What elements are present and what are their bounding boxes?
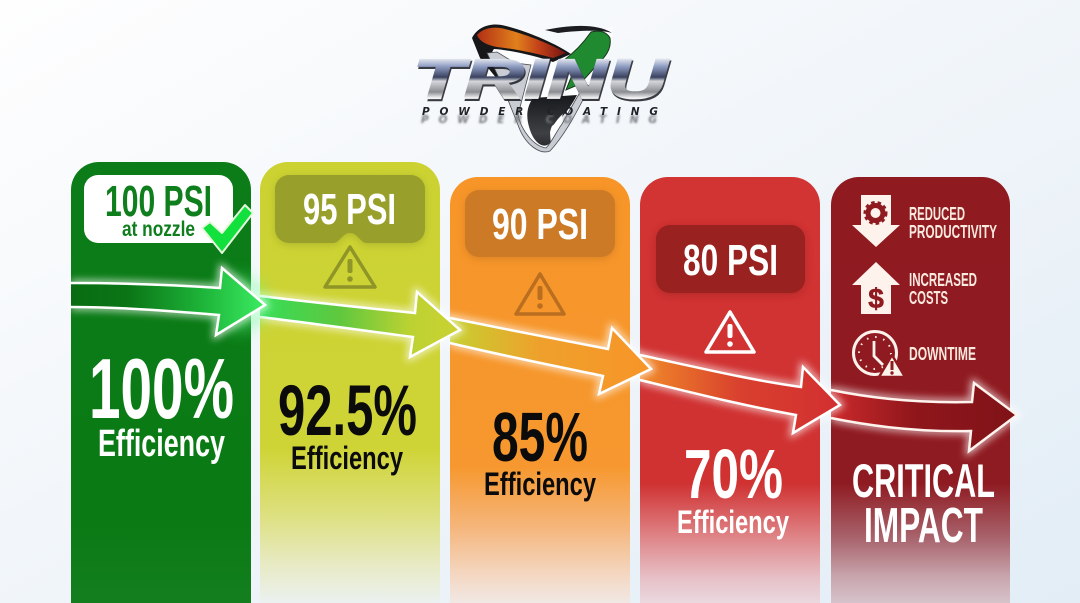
logo wordmark shadow: TRINU [414, 49, 670, 112]
arrow 3: 90 PSI to 80 PSI [450, 318, 651, 394]
icon: increased costs arrow with dollar: $ [868, 283, 884, 314]
logo: TriNu Powder Coating [413, 24, 670, 152]
pressure badge [656, 225, 805, 295]
pressure badge: 90 PSI [492, 200, 588, 249]
arrow 1: 100 PSI to 95 PSI [71, 268, 266, 335]
icon: reduced productivity arrow with gear [852, 195, 900, 247]
pressure badge: 95 PSI [303, 185, 396, 234]
column 2: 95 PSI [260, 162, 440, 603]
impact heading: IMPACT [864, 499, 983, 553]
white pressure badge: at nozzle [122, 218, 195, 241]
percent: 100% [89, 342, 234, 437]
icon: clock with warning [854, 332, 905, 377]
text: reduced productivity [909, 204, 997, 242]
pressure badge [465, 190, 615, 259]
icon: increased costs arrow with dollar [852, 262, 900, 314]
pressure badge: 80 PSI [683, 236, 778, 285]
logo emblem [472, 24, 613, 152]
icon: warning triangle [706, 312, 754, 352]
icon: warning triangle [325, 247, 375, 287]
efficiency label: Efficiency [677, 504, 789, 540]
white pressure badge: 100 PSI [105, 177, 212, 226]
column 4: 80 PSI [640, 177, 820, 603]
white pressure badge [84, 175, 233, 243]
logo wordmark: TRINU [413, 47, 669, 110]
column 5: critical impact [831, 177, 1010, 603]
column 3: 90 PSI [450, 177, 630, 603]
text: downtime: DOWNTIME [909, 344, 976, 364]
logo subtitle: POWDER COATING [422, 106, 658, 118]
arrow 2: 95 PSI to 90 PSI [260, 292, 460, 357]
arrow 4: 80 PSI to critical [640, 355, 840, 433]
icon: check mark [202, 205, 253, 253]
efficiency label: Efficiency [291, 440, 403, 476]
percent: 70% [684, 435, 783, 513]
critical heading: CRITICAL [852, 454, 995, 507]
efficiency label: Efficiency [98, 423, 225, 465]
efficiency label: Efficiency [484, 466, 596, 502]
arrow 5: to critical impact [831, 383, 1017, 451]
column background [71, 162, 251, 603]
column background [450, 177, 630, 603]
percent: 85% [492, 398, 588, 476]
column background [831, 177, 1010, 603]
column background [260, 162, 440, 603]
text: increased costs: COSTS [909, 288, 948, 308]
logo subtitle shadow: POWDER COATING [421, 114, 657, 126]
column 1: 100 PSI [71, 162, 253, 603]
text: reduced productivity: REDUCED [909, 204, 965, 224]
percent: 92.5% [278, 372, 417, 451]
text: reduced productivity: PRODUCTIVITY [909, 222, 997, 242]
text: increased costs: INCREASED [909, 270, 977, 290]
pressure badge [275, 175, 425, 245]
column background [640, 177, 820, 603]
icon: warning triangle [516, 274, 564, 314]
text: increased costs [909, 270, 977, 308]
